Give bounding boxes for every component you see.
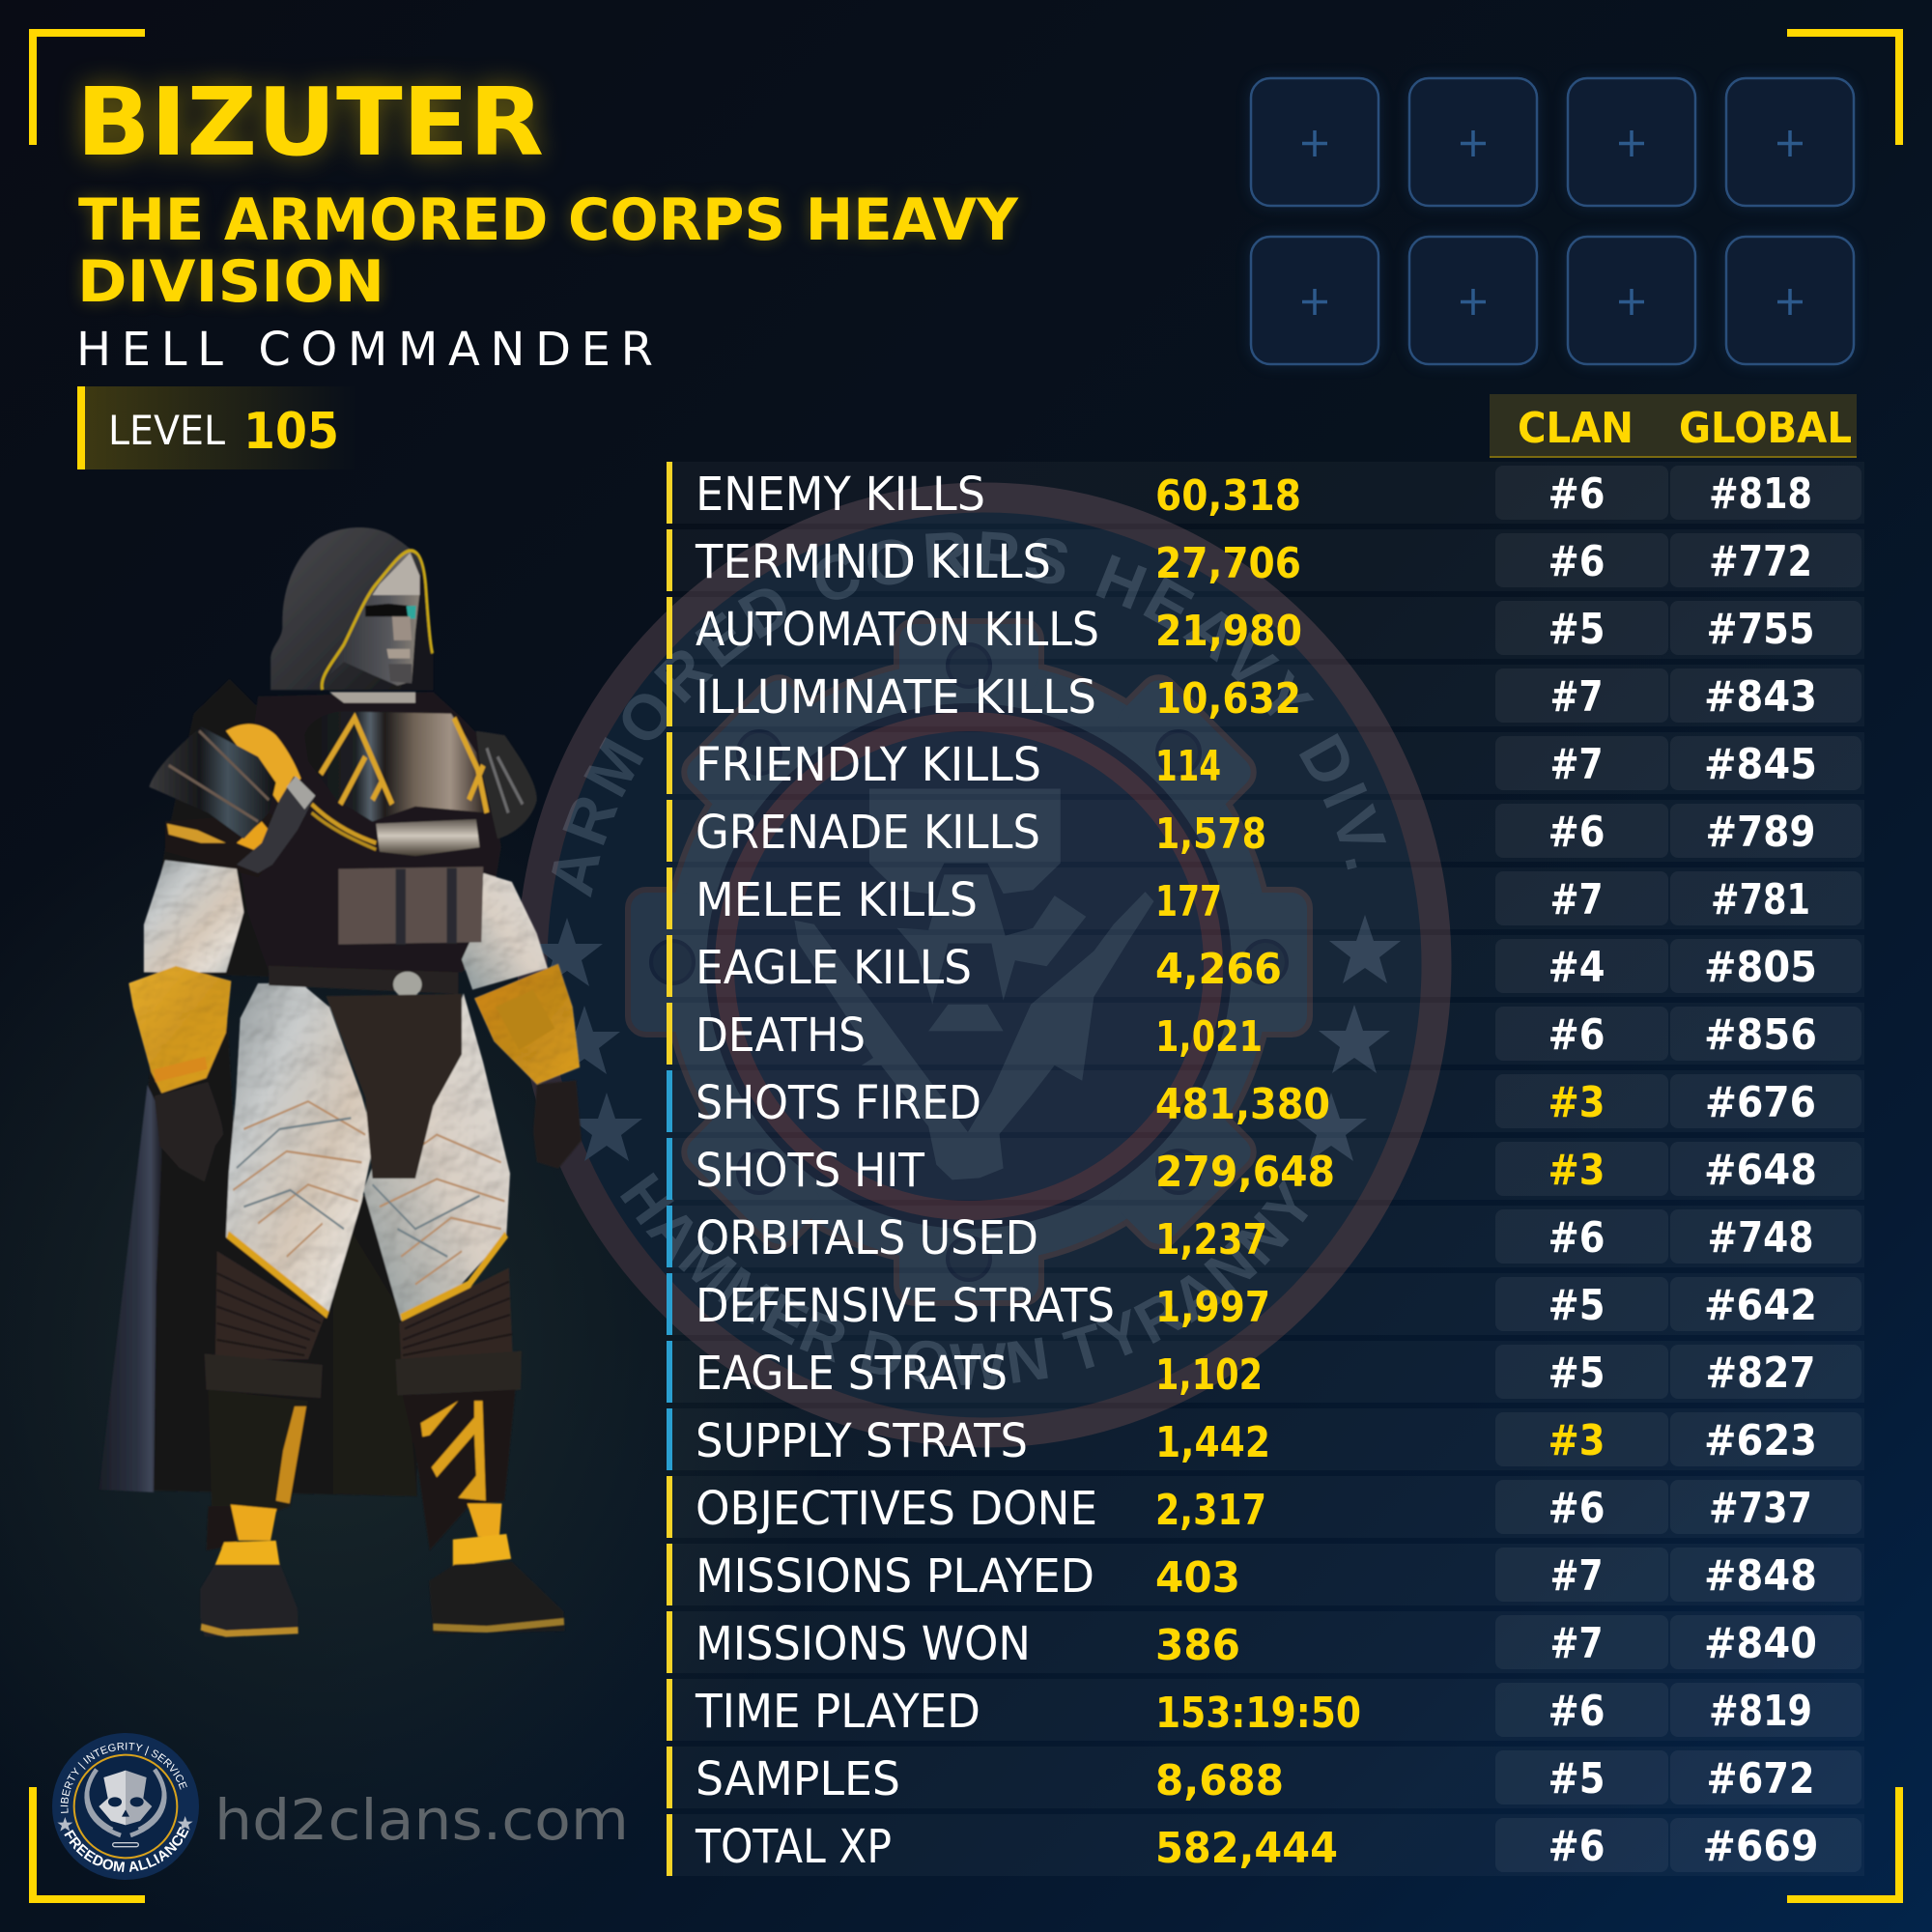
row: deaths: DEATHS [696,1009,866,1063]
row: grenade kills: GRENADE KILLS [696,806,1040,860]
row: enemy kills: #818 [1709,469,1812,519]
row: friendly kills: #7 [1549,740,1604,789]
row: missions won [667,1611,1864,1673]
row: supply strats: #623 [1704,1416,1817,1465]
row: melee kills [667,867,1864,929]
row: defensive strats: DEFENSIVE STRATS [696,1279,1115,1333]
row: objectives done: #6 [1548,1484,1605,1533]
row: terminid kills: TERMINID KILLS [695,535,1051,589]
row: time played: TIME PLAYED [695,1685,980,1739]
row: objectives done: 2,317 [1155,1486,1266,1535]
row: melee kills: MELEE KILLS [696,873,978,927]
row: enemy kills: #6 [1548,469,1605,519]
lower body: cape, legs and boots [99,919,565,1636]
title: player name: BIZUTER [76,68,544,177]
row: supply strats [667,1408,1864,1470]
row: enemy kills: 60,318 [1155,471,1301,521]
row: enemy kills: ENEMY KILLS [696,468,985,522]
row: grenade kills: #789 [1706,808,1816,857]
row: samples: SAMPLES [696,1752,900,1806]
row: automaton kills: #5 [1548,605,1605,654]
mask face [329,551,419,686]
freedom alliance logo: LIBERTY | INTEGRITY | SERVICE [60,1743,187,1813]
row: defensive strats: #642 [1704,1281,1817,1330]
row: samples: 8,688 [1155,1756,1284,1805]
right arm [476,731,537,838]
row: eagle strats: #827 [1706,1349,1816,1398]
row: shots fired: SHOTS FIRED [696,1076,981,1130]
freedom alliance logo: FREEDOM ALLIANCE [64,1827,189,1872]
corner bracket: top right [1787,33,1899,145]
left arm [140,856,247,977]
row: friendly kills: 114 [1155,742,1221,791]
watermark emblem: armored corps heavy division: HAMMER DOWN TYRANNY [620,1173,1308,1385]
row: friendly kills [667,732,1864,794]
row: eagle kills: #4 [1548,943,1605,992]
row: illuminate kills [667,665,1864,726]
rank title: HELL COMMANDER [76,323,653,377]
row: samples: #5 [1548,1754,1605,1804]
canister [376,819,480,856]
row: eagle kills: #805 [1704,943,1817,992]
row: eagle strats: #5 [1548,1349,1605,1398]
row: missions won: #7 [1549,1619,1604,1668]
row: missions played: #848 [1704,1551,1817,1601]
stats table [667,462,1864,1876]
row: friendly kills: #845 [1704,740,1817,789]
row: illuminate kills: ILLUMINATE KILLS [696,670,1096,724]
row: eagle strats: EAGLE STRATS [696,1347,1008,1401]
table header: clan and global [1490,394,1857,458]
level badge: 105 [243,403,339,461]
row: total xp: 582,444 [1155,1824,1338,1873]
row: total xp [667,1814,1864,1876]
badge slots grid [1251,78,1854,364]
row: eagle strats: 1,102 [1155,1350,1263,1400]
freedom alliance logo [52,1733,199,1880]
pants [326,994,462,1179]
row: shots hit: #3 [1548,1146,1605,1195]
row: deaths: #856 [1704,1010,1817,1060]
row: shots hit: #648 [1704,1146,1817,1195]
row: orbitals used: #748 [1708,1213,1814,1263]
row: terminid kills: #772 [1709,537,1812,586]
row: eagle strats [667,1341,1864,1403]
row: illuminate kills: #7 [1549,672,1604,722]
row: defensive strats: 1,997 [1155,1283,1270,1332]
row: missions won: 386 [1155,1621,1240,1670]
row: missions played: MISSIONS PLAYED [696,1549,1094,1604]
row: deaths: #6 [1548,1010,1605,1060]
row: grenade kills [667,800,1864,862]
row: automaton kills: 21,980 [1155,607,1302,656]
row: shots fired [667,1070,1864,1132]
row: illuminate kills: 10,632 [1155,674,1301,724]
pouches [338,867,483,945]
watermark emblem: armored corps heavy division [518,483,1451,1447]
row: automaton kills: AUTOMATON KILLS [696,603,1099,657]
row: samples [667,1747,1864,1808]
row: shots hit: 279,648 [1155,1148,1335,1197]
subtitle: clan name: DIVISION [77,248,384,316]
chest plate [304,712,487,821]
corner bracket: bottom left [33,1787,145,1899]
row: samples: #672 [1706,1754,1814,1804]
row: grenade kills: #6 [1548,808,1605,857]
row: objectives done [667,1476,1864,1538]
silver thigh left [222,980,380,1323]
corner bracket: bottom right [1787,1787,1899,1899]
row: terminid kills: #6 [1548,537,1605,586]
row: objectives done: #737 [1709,1484,1812,1533]
row: terminid kills [667,529,1864,591]
row: orbitals used: ORBITALS USED [696,1211,1038,1265]
row: time played [667,1679,1864,1741]
row: shots fired: #676 [1705,1078,1816,1127]
row: time played: #819 [1709,1687,1812,1736]
subtitle: clan name [77,186,1020,316]
row: missions won: #840 [1704,1619,1817,1668]
corner bracket: top left [33,33,145,145]
row: shots fired: #3 [1548,1078,1605,1127]
row: defensive strats [667,1273,1864,1335]
subtitle: clan name: THE ARMORED CORPS HEAVY [78,186,1020,254]
row: terminid kills: 27,706 [1155,539,1301,588]
row: enemy kills [667,462,1864,524]
row: supply strats: #3 [1548,1416,1605,1465]
row: shots fired: 481,380 [1155,1080,1330,1129]
row: automaton kills [667,597,1864,659]
character figure: armored helldiver [99,527,583,1636]
row: illuminate kills: #843 [1704,672,1817,722]
row: deaths [667,1003,1864,1065]
row: missions played: #7 [1549,1551,1604,1601]
row: missions won: MISSIONS WON [696,1617,1031,1671]
row: eagle kills: 4,266 [1155,945,1282,994]
row: eagle kills: EAGLE KILLS [696,941,972,995]
row: shots hit [667,1138,1864,1200]
upper body: torso, arms, head [126,527,583,1179]
row: objectives done: OBJECTIVES DONE [696,1482,1097,1536]
table header: clan and global: GLOBAL [1679,404,1852,453]
row: supply strats: 1,442 [1155,1418,1270,1467]
row: supply strats: SUPPLY STRATS [696,1414,1028,1468]
left glove [155,1082,223,1181]
level badge [77,386,357,469]
hood [270,527,433,690]
silver thigh right [361,990,516,1329]
row: orbitals used: 1,237 [1155,1215,1267,1264]
row: defensive strats: #5 [1548,1281,1605,1330]
row: melee kills: 177 [1155,877,1222,926]
row: automaton kills: #755 [1706,605,1814,654]
row: missions played: 403 [1155,1553,1240,1603]
row: eagle kills [667,935,1864,997]
row: total xp: #6 [1548,1822,1605,1871]
row: deaths: 1,021 [1155,1012,1263,1062]
belt [269,966,458,994]
row: orbitals used [667,1206,1864,1267]
row: friendly kills: FRIENDLY KILLS [696,738,1041,792]
row: melee kills: #7 [1549,875,1604,924]
row: total xp: TOTAL XP [695,1820,892,1874]
row: total xp: #669 [1702,1822,1818,1871]
row: time played: #6 [1548,1687,1605,1736]
row: grenade kills: 1,578 [1155,810,1266,859]
watermark emblem: armored corps heavy division: ARMORED CORPS HEAVY DIV. [552,531,1386,897]
row: time played: 153:19:50 [1155,1689,1361,1738]
row: shots hit: SHOTS HIT [696,1144,925,1198]
website url: hd2clans.com [214,1787,629,1853]
collar [329,692,415,703]
table header: clan and global: CLAN [1518,404,1634,453]
row: missions played [667,1544,1864,1605]
row: melee kills: #781 [1711,875,1810,924]
level badge: LEVEL [108,407,226,454]
row: orbitals used: #6 [1548,1213,1605,1263]
